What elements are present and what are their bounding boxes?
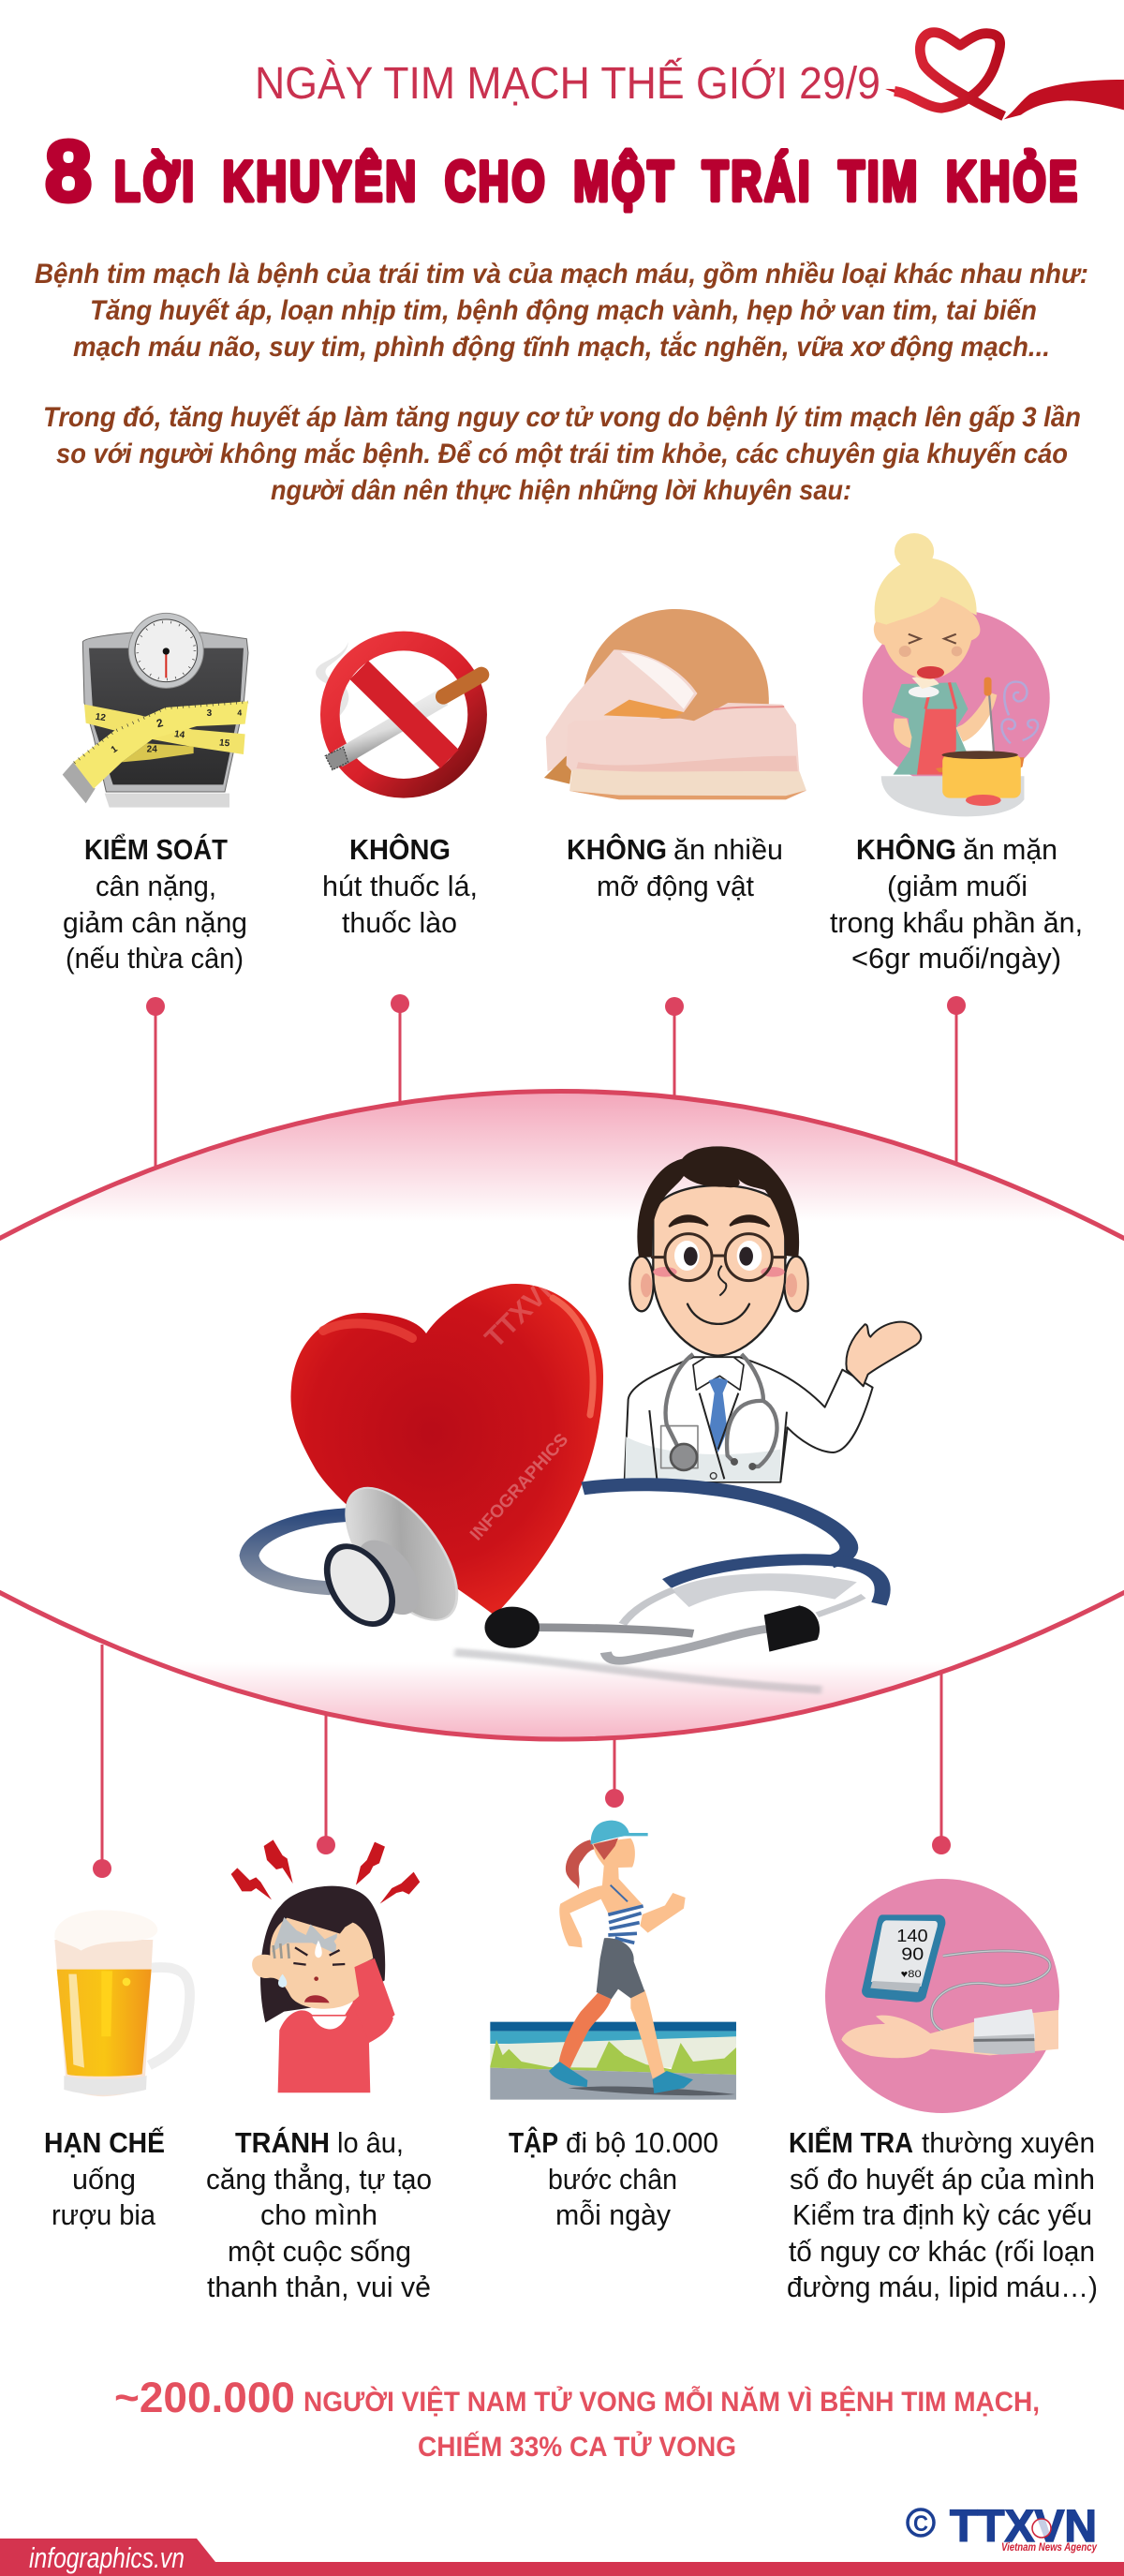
label: tập đi bộ	[509, 2125, 718, 2231]
logo: TTXVN: Vietnam News Agency	[1001, 2540, 1098, 2554]
intro paragraph 1	[35, 259, 1088, 363]
label: không hút thuốc	[322, 832, 478, 939]
icon: blood pressure monitor	[825, 1879, 1059, 2113]
bottom statistic: NGƯỜI VIỆT NAM TỬ VONG MỖI NĂM VÌ BỆNH TIM MẠCH,	[303, 2386, 1040, 2418]
icon: woman tasting salty soup	[863, 533, 1050, 816]
bottom statistic: CHIẾM 33% CA TỬ VONG	[418, 2431, 736, 2463]
label: kiểm tra huyết áp: thường xuyên	[922, 2126, 1095, 2159]
label: kiểm soát cân nặng: giảm cân nặng	[63, 906, 247, 939]
label: không ăn mặn: ăn mặn	[963, 833, 1057, 866]
label: không hút thuốc: KHÔNG	[349, 832, 451, 866]
icon: weighing scale with tape: 24	[147, 745, 157, 755]
footer bar: infographics.vn	[29, 2541, 185, 2574]
illustration: red heart: INFOGRAPHICS	[466, 1430, 572, 1544]
logo: TTXVN: TTXVN	[950, 2502, 1097, 2552]
intro paragraph 1: Tăng huyết áp, loạn nhịp tim, bệnh động mạch vành, hẹp hở van tim, tai biến	[90, 295, 1037, 326]
label: không ăn nhiều mỡ	[567, 832, 783, 902]
label: kiểm tra huyết áp: Kiểm tra định kỳ các yếu	[792, 2198, 1092, 2231]
illustration: red heart: TTXVN	[480, 1267, 566, 1354]
label: không ăn nhiều mỡ: KHÔNG	[567, 832, 667, 866]
footer bar	[0, 2539, 1124, 2576]
label: không ăn mặn	[830, 832, 1083, 975]
icon: weighing scale with tape	[63, 613, 248, 808]
icon: walking woman	[490, 1821, 736, 2100]
label: tập đi bộ: mỗi ngày	[555, 2198, 671, 2231]
illustration: doctor	[625, 1146, 921, 1482]
subtitle: NGÀY TIM MẠCH THẾ GIỚI 29/9	[255, 58, 880, 109]
intro paragraph 1: mạch máu não, suy tim, phình động tĩnh mạch, tắc nghẽn, vữa xơ động mạch...	[73, 331, 1050, 363]
label: kiểm tra huyết áp: tố nguy cơ khác (rối loạn	[789, 2235, 1095, 2268]
label: hạn chế rượu bia: HẠN CHẾ	[44, 2126, 165, 2159]
label: tránh lo âu: lo âu,	[337, 2126, 404, 2159]
illustration: stethoscope	[249, 1477, 882, 1690]
logo: TTXVN: C	[913, 2511, 928, 2537]
icon: weighing scale with tape: 12	[95, 712, 107, 723]
icon: beer mug	[54, 1910, 190, 2096]
label: tránh lo âu: một cuộc sống	[228, 2235, 411, 2268]
label: kiểm tra huyết áp: số đo huyết áp của mình	[790, 2163, 1095, 2196]
label: kiểm soát cân nặng	[63, 833, 247, 975]
label: tập đi bộ: đi bộ 10.000	[566, 2126, 718, 2159]
intro paragraph 2: người dân nên thực hiện những lời khuyên sau:	[271, 475, 851, 506]
label: tránh lo âu: cho mình	[260, 2198, 377, 2231]
ribbon heart	[885, 33, 1124, 119]
label: kiểm tra huyết áp: đường máu, lipid máu…)	[787, 2271, 1098, 2303]
label: hạn chế rượu bia	[44, 2126, 165, 2231]
title: 8	[45, 124, 92, 219]
label: tập đi bộ: TẬP	[509, 2125, 558, 2159]
connector lines and dots: top	[146, 994, 966, 1167]
icon: weighing scale with tape: 14	[173, 729, 185, 741]
label: tránh lo âu: TRÁNH	[235, 2126, 330, 2159]
icon: weighing scale with tape: 15	[218, 737, 230, 750]
label: hạn chế rượu bia: rượu bia	[52, 2198, 156, 2231]
icon: weighing scale with tape: 3	[207, 708, 213, 719]
icon: stressed girl	[231, 1839, 420, 2092]
label: tập đi bộ: bước chân	[548, 2163, 677, 2196]
label: không ăn mặn: <6gr muối/ngày)	[851, 942, 1061, 975]
label: tránh lo âu: thanh thản, vui vẻ	[207, 2271, 431, 2303]
bottom statistic	[114, 2374, 1040, 2463]
label: không hút thuốc: thuốc lào	[342, 906, 457, 939]
intro paragraph 2	[43, 402, 1081, 506]
icon: blood pressure monitor: ♥80	[901, 1969, 922, 1980]
label: không hút thuốc: hút thuốc lá,	[322, 870, 478, 902]
central eye-shaped panel	[0, 1091, 1124, 1739]
label: kiểm tra huyết áp	[787, 2126, 1098, 2303]
label: kiểm soát cân nặng: KIỂM SOÁT	[84, 833, 228, 866]
label: không ăn nhiều mỡ: ăn nhiều	[673, 833, 783, 866]
label: không ăn mặn: KHÔNG	[856, 832, 956, 866]
label: không ăn nhiều mỡ: mỡ động vật	[597, 870, 754, 902]
label: kiểm soát cân nặng: cân nặng,	[96, 870, 216, 902]
label: không ăn mặn: (giảm muối	[887, 870, 1028, 902]
icon: blood pressure monitor: 140	[896, 1926, 928, 1945]
connector lines and dots: bottom	[93, 1645, 951, 1878]
label: không ăn mặn: trong khẩu phần ăn,	[830, 906, 1083, 939]
icon: weighing scale with tape: 4	[237, 707, 242, 717]
label: kiểm soát cân nặng: (nếu thừa cân)	[66, 942, 244, 975]
label: kiểm tra huyết áp: KIỂM TRA	[789, 2126, 913, 2159]
icon: no smoking sign	[316, 641, 481, 788]
label: tránh lo âu: căng thẳng, tự tạo	[206, 2162, 432, 2196]
label: tránh lo âu	[206, 2126, 432, 2303]
icon: weighing scale with tape: 1	[110, 744, 120, 755]
illustration: red heart	[290, 1267, 603, 1616]
icon: pork fat	[544, 609, 806, 799]
title	[45, 124, 1080, 219]
icon: weighing scale with tape: 2	[155, 716, 165, 730]
icon: blood pressure monitor: 90	[901, 1943, 924, 1963]
label: hạn chế rượu bia: uống	[72, 2163, 136, 2196]
bottom statistic: ~200.000	[114, 2374, 295, 2421]
